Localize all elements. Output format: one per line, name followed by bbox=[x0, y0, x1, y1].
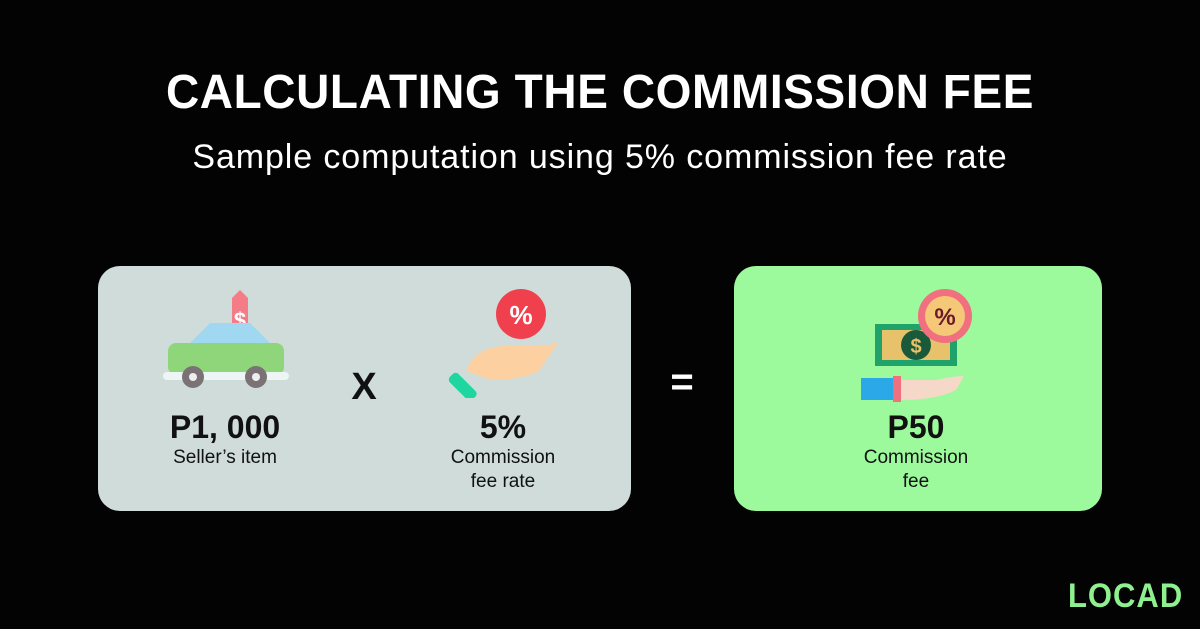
title: CALCULATING THE COMMISSION FEE bbox=[166, 64, 1034, 118]
icon: car with price tag bbox=[163, 290, 289, 388]
icon: money with percent bbox=[861, 289, 972, 402]
value: rate: Commission bbox=[451, 447, 555, 468]
value: rate bbox=[451, 409, 555, 492]
panel: inputs bbox=[98, 266, 631, 511]
icon: car with price tag: $ bbox=[234, 308, 246, 333]
icon: hand with percent: % bbox=[509, 300, 533, 330]
panel: result bbox=[734, 266, 1102, 511]
icon: money with percent: % bbox=[934, 304, 956, 331]
subtitle: Sample computation using 5% commission fee rate bbox=[192, 138, 1008, 176]
value: rate: fee rate bbox=[471, 471, 535, 492]
value: commission fee: fee bbox=[903, 471, 929, 492]
value: item price: Seller’s item bbox=[173, 447, 277, 468]
value: commission fee: P50 bbox=[888, 409, 944, 445]
value: commission fee bbox=[864, 409, 968, 492]
icon: hand with percent bbox=[448, 289, 559, 398]
operator: multiply: X bbox=[351, 366, 377, 408]
value: item price bbox=[170, 409, 280, 468]
value: commission fee: Commission bbox=[864, 447, 968, 468]
logo: LOCAD bbox=[1068, 576, 1183, 615]
value: item price: P1, 000 bbox=[170, 409, 280, 445]
icon: money with percent: $ bbox=[910, 336, 922, 358]
value: rate: 5% bbox=[480, 409, 526, 445]
operator: equals: = bbox=[670, 360, 694, 404]
